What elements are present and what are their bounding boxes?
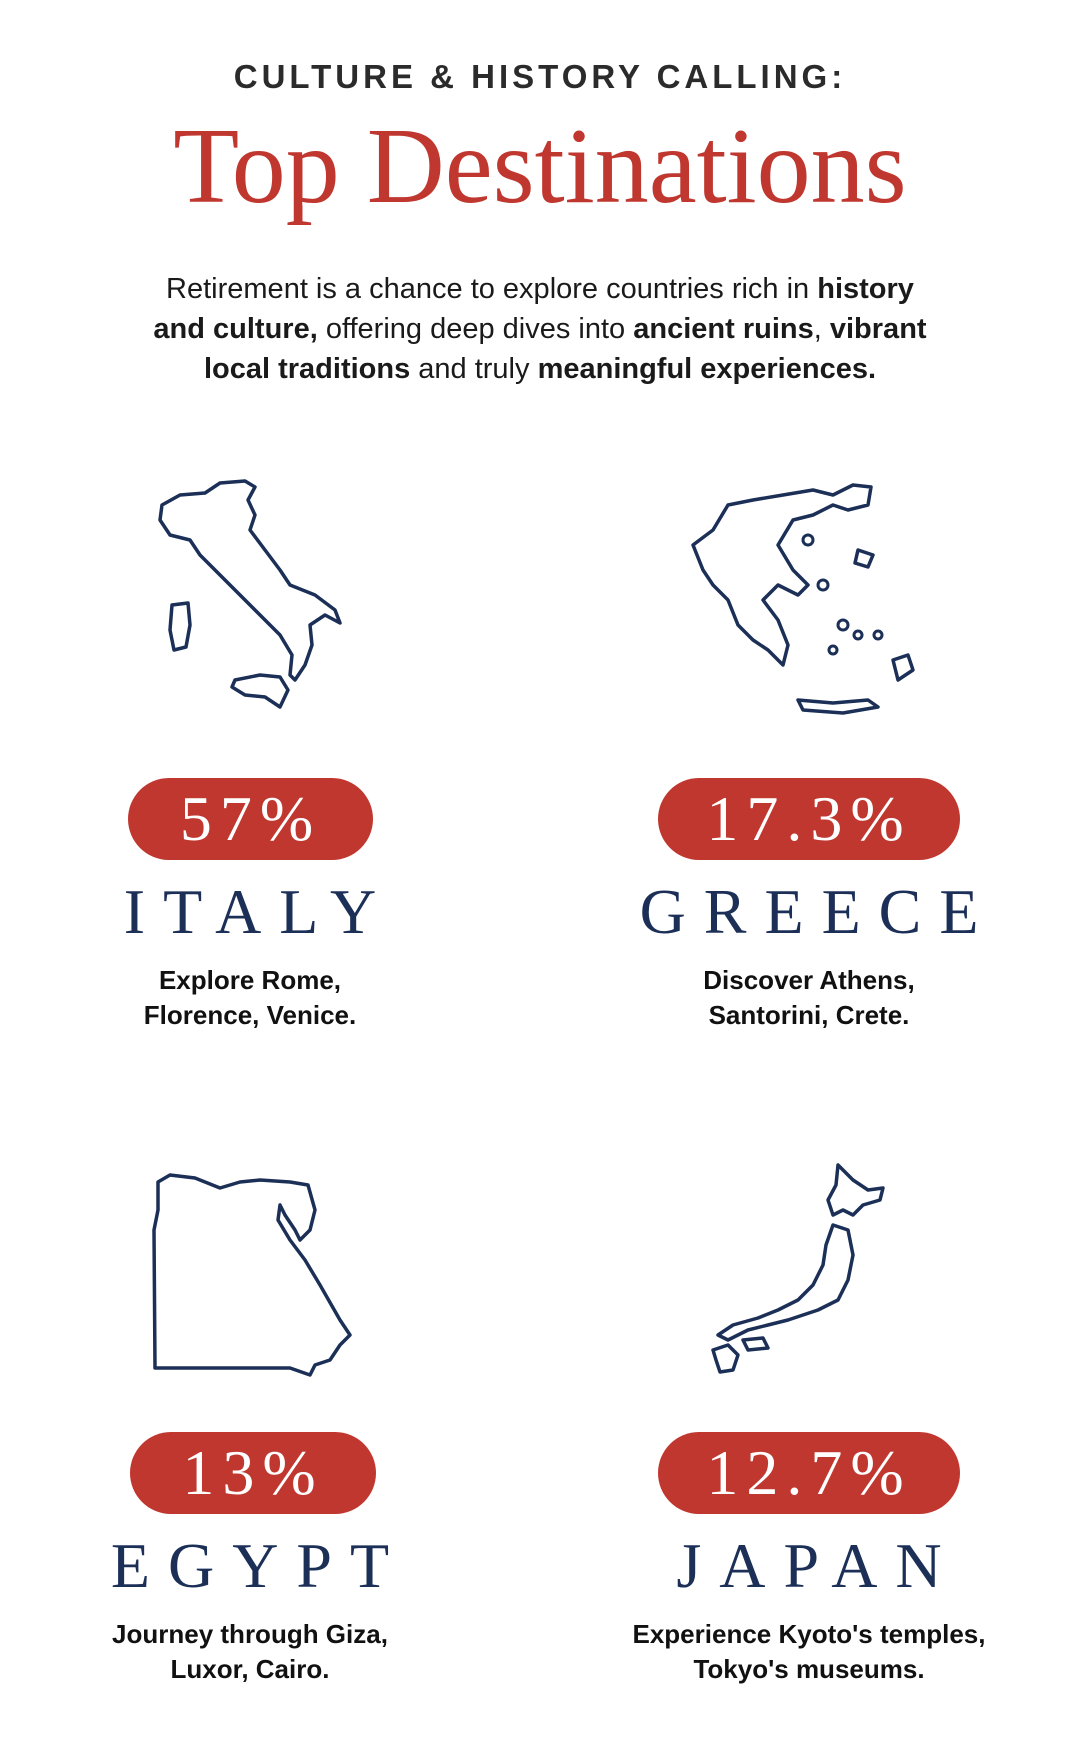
panel: greece [640, 483, 996, 1030]
icon: japan map [711, 1163, 885, 1374]
panel: italy [124, 479, 394, 1030]
country name: JAPAN [676, 1530, 960, 1601]
country name: GREECE [640, 876, 996, 947]
title: Top Destinations [173, 107, 907, 226]
description [112, 1619, 388, 1684]
pill: 13%: 13% [182, 1437, 324, 1508]
panel: japan [632, 1163, 985, 1684]
intro text: local traditions and truly meaningful experiences. [204, 353, 876, 385]
description: Experience Kyoto's temples, [632, 1619, 985, 1649]
panel: egypt [111, 1173, 407, 1684]
pill: 17.3% [658, 778, 960, 860]
description: Tokyo's museums. [693, 1654, 925, 1684]
intro text [153, 273, 927, 385]
pill: 57% [128, 778, 373, 860]
icon: egypt map [152, 1173, 352, 1377]
icon: greece map [691, 483, 915, 715]
kicker heading: CULTURE & HISTORY CALLING: [234, 58, 846, 95]
pill: 12.7% [658, 1432, 960, 1514]
description [632, 1619, 985, 1684]
description [703, 965, 915, 1030]
description: Florence, Venice. [144, 1000, 356, 1030]
country name: ITALY [124, 876, 394, 947]
description [144, 965, 356, 1030]
description: Discover Athens, [703, 965, 915, 995]
icon: italy map [158, 479, 342, 709]
description: Santorini, Crete. [709, 1000, 909, 1030]
pill: 17.3%: 17.3% [706, 783, 912, 854]
intro text: and culture, offering deep dives into ancient ruins, vibrant [153, 313, 927, 345]
country name: EGYPT [111, 1530, 407, 1601]
description: Journey through Giza, [112, 1619, 388, 1649]
intro text: Retirement is a chance to explore countries rich in history [166, 273, 914, 305]
description: Explore Rome, [159, 965, 341, 995]
pill: 13% [130, 1432, 376, 1514]
pill: 57%: 57% [180, 783, 321, 854]
description: Luxor, Cairo. [171, 1654, 329, 1684]
pill: 12.7%: 12.7% [706, 1437, 912, 1508]
